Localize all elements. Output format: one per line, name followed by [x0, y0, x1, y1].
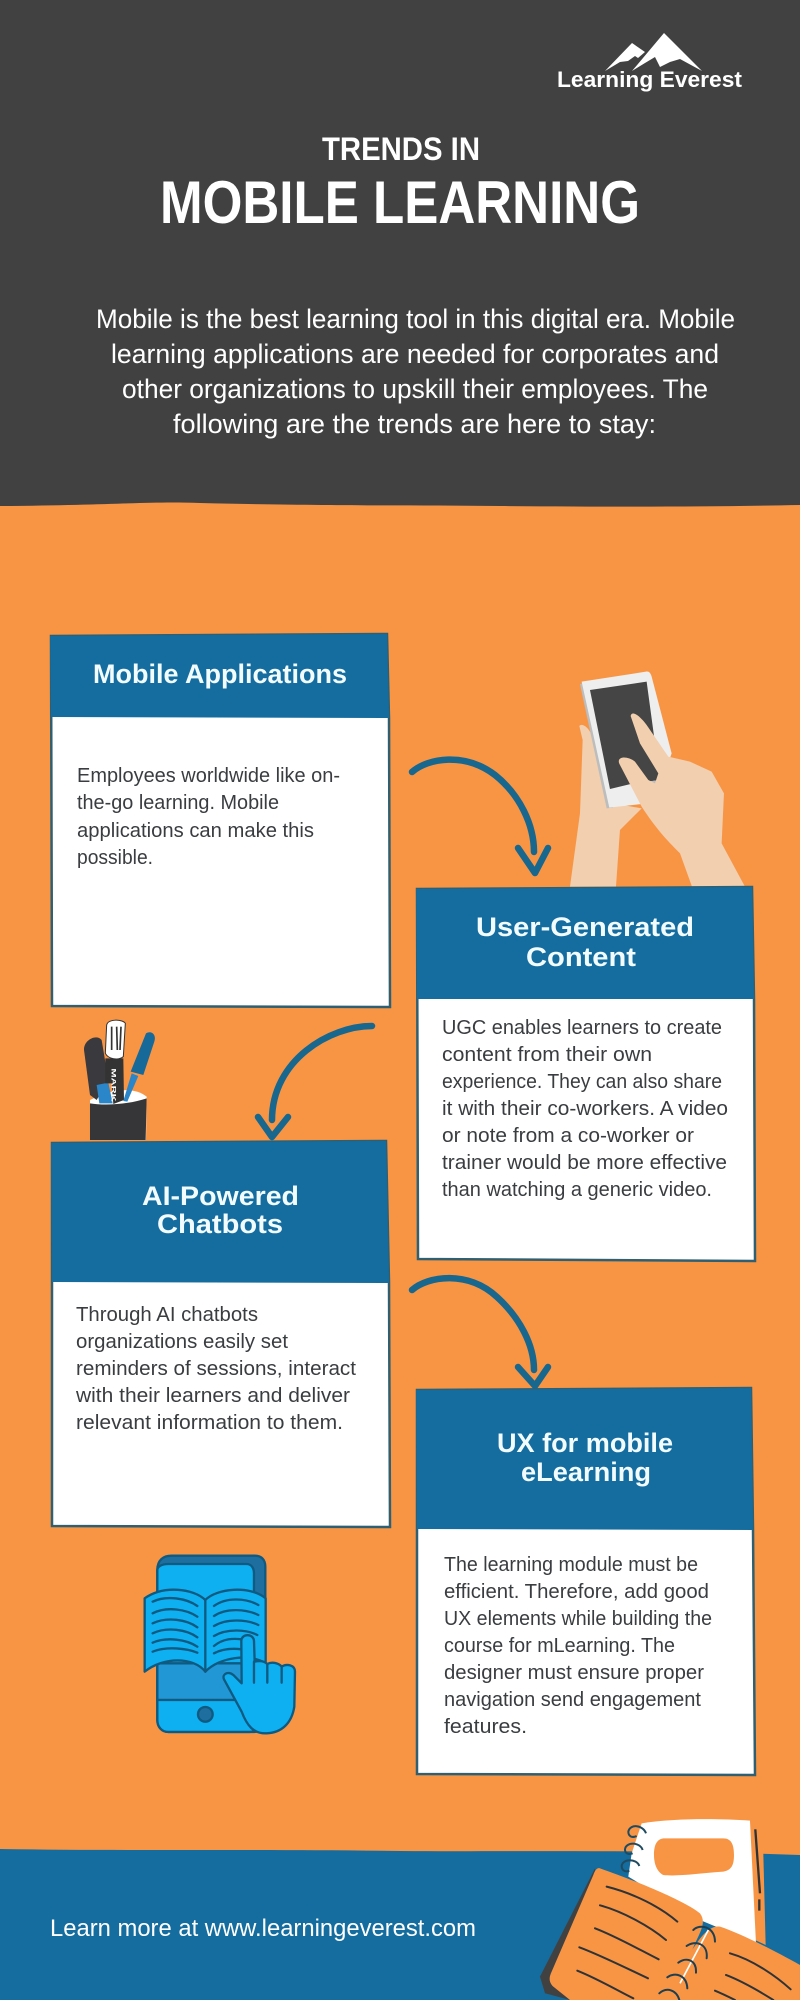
illustration: phone with book and pointing hand: [145, 1556, 295, 1733]
body text: the-go learning. Mobile: [77, 792, 279, 814]
intro text: following are the trends are here to stay:: [173, 409, 656, 439]
body text: it with their co-workers. A video: [442, 1098, 728, 1120]
heading: Chatbots: [157, 1209, 283, 1239]
heading: AI-Powered: [142, 1181, 299, 1211]
intro text: [96, 304, 735, 439]
body text: content from their own: [442, 1044, 652, 1066]
intro text: learning applications are needed for corporates and: [111, 339, 719, 369]
arrow: AI-Powered Chatbots to UX for mobile eLearning: [412, 1278, 548, 1386]
logo: Learning Everest: [557, 33, 743, 92]
intro text: other organizations to upskill their employees. The: [122, 374, 708, 404]
body text: experience. They can also share: [442, 1071, 722, 1093]
illustration: pen holder: [84, 1020, 155, 1140]
body text: [77, 765, 340, 869]
body text: organizations easily set: [76, 1331, 288, 1353]
body text: [444, 1554, 712, 1738]
heading: [497, 1428, 673, 1487]
body text: designer must ensure proper: [444, 1662, 704, 1684]
heading: User-Generated: [476, 912, 694, 942]
illustration: hands holding phone: [570, 672, 745, 887]
panel: footer band: [0, 1849, 800, 2000]
body text: course for mLearning. The: [444, 1635, 675, 1657]
body text: applications can make this: [77, 820, 314, 842]
body text: navigation send engagement: [444, 1689, 701, 1711]
body text: trainer would be more effective: [442, 1152, 727, 1174]
illustration: pen holder: MARK: [109, 1068, 116, 1102]
panel: Mobile Applications: [50, 634, 390, 1007]
title: MOBILE LEARNING: [160, 169, 640, 236]
title: TRENDS IN: [322, 131, 480, 167]
body text: features.: [444, 1716, 527, 1738]
heading: [142, 1181, 299, 1239]
panel: AI-Powered Chatbots: [51, 1141, 390, 1527]
intro text: Mobile is the best learning tool in this digital era. Mobile: [96, 304, 735, 334]
body text: UGC enables learners to create: [442, 1017, 722, 1039]
logo: Learning Everest: Learning Everest: [557, 67, 743, 92]
panel: UX for mobile eLearning: [416, 1388, 755, 1775]
body text: or note from a co-worker or: [442, 1125, 694, 1147]
body text: UX elements while building the: [444, 1608, 712, 1630]
illustration: spiral notebooks: [540, 1819, 800, 2000]
panel: User-Generated Content: [416, 887, 755, 1261]
heading: Mobile Applications: [93, 659, 347, 689]
body text: possible.: [77, 847, 153, 869]
footer link text: Learn more at www.learningeverest.com: [50, 1915, 476, 1942]
heading: [476, 912, 694, 972]
body text: efficient. Therefore, add good: [444, 1581, 709, 1603]
body text: The learning module must be: [444, 1554, 698, 1576]
body text: relevant information to them.: [76, 1412, 343, 1434]
body text: than watching a generic video.: [442, 1179, 712, 1201]
arrow: User-Generated Content to AI-Powered Chatbots: [258, 1026, 372, 1137]
body text: with their learners and deliver: [75, 1385, 350, 1407]
body text: Employees worldwide like on-: [77, 765, 340, 787]
heading: UX for mobile: [497, 1428, 673, 1458]
title: [160, 131, 640, 236]
arrow: Mobile Applications to User-Generated Content: [412, 760, 548, 873]
heading: eLearning: [521, 1457, 651, 1487]
heading: Content: [526, 942, 636, 972]
body text: [442, 1017, 728, 1201]
body text: Through AI chatbots: [76, 1304, 258, 1326]
panel: dark header: [0, 0, 800, 507]
body text: [75, 1304, 356, 1434]
body text: reminders of sessions, interact: [76, 1358, 356, 1380]
